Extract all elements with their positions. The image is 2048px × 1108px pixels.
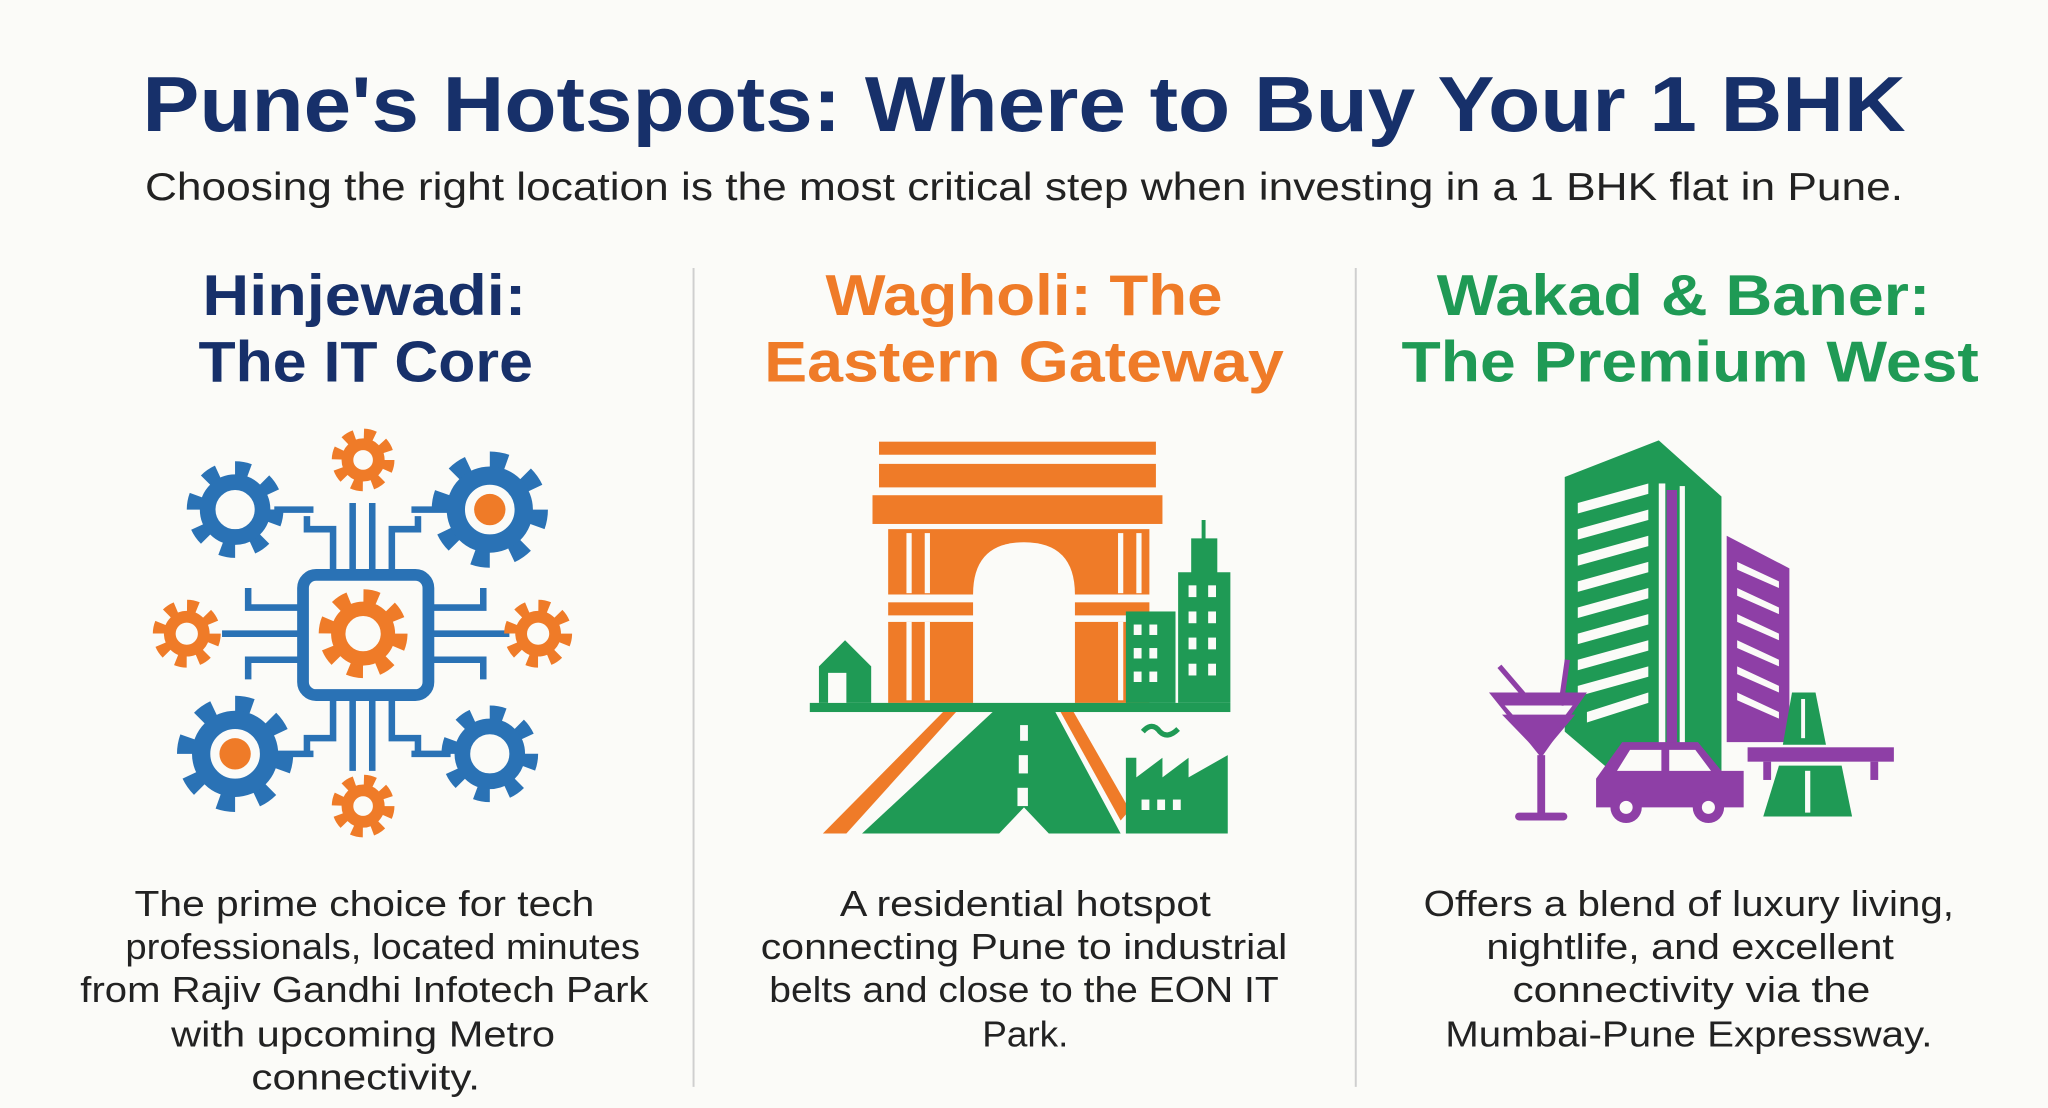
text: Wakad & Baner description: Offers a blend of luxury living, bbox=[1424, 883, 1954, 924]
text: Wakad & Baner description: connectivity via the bbox=[1512, 969, 1870, 1010]
heading: Hinjewadi bbox=[199, 264, 533, 395]
icon: gate, road and city bbox=[810, 442, 1230, 834]
text: Hinjewadi description: from Rajiv Gandhi Infotech Park bbox=[80, 969, 649, 1010]
heading: Wakad & Baner: Wakad & Baner: bbox=[1437, 264, 1930, 328]
text: Hinjewadi description: The prime choice for tech bbox=[135, 883, 594, 924]
text: Wakad & Baner description: Mumbai-Pune Expressway. bbox=[1445, 1013, 1932, 1054]
icon: premium buildings, car, cocktail, highway bbox=[1489, 440, 1894, 823]
subtitle: Choosing the right location is the most critical step when investing in a 1 BHK flat in Pune. bbox=[145, 166, 1903, 209]
heading: Wagholi: Eastern Gateway bbox=[764, 331, 1284, 395]
text: Hinjewadi description: connectivity. bbox=[251, 1057, 480, 1098]
text: Hinjewadi description bbox=[80, 883, 649, 1098]
text: Wagholi description bbox=[761, 883, 1287, 1054]
heading: Hinjewadi: Hinjewadi: bbox=[202, 264, 526, 328]
title: Pune's Hotspots: Where to Buy Your 1 BHK bbox=[142, 60, 1906, 148]
text: Wagholi description: A residential hotspot bbox=[840, 883, 1211, 924]
text: Wagholi description: belts and close to the EON IT bbox=[769, 969, 1279, 1010]
icon: IT gears and chip bbox=[159, 435, 566, 831]
heading: Wagholi: Wagholi: The bbox=[825, 264, 1223, 328]
text: Hinjewadi description: professionals, located minutes bbox=[125, 926, 640, 967]
text: Wakad & Baner description: nightlife, and excellent bbox=[1486, 926, 1894, 967]
text: Wagholi description: connecting Pune to industrial bbox=[761, 926, 1287, 967]
heading: Wakad & Baner bbox=[1401, 264, 1979, 395]
text: Hinjewadi description: with upcoming Metro bbox=[170, 1013, 555, 1054]
gears bbox=[159, 435, 566, 831]
heading: Wagholi bbox=[764, 264, 1284, 395]
text: Wakad & Baner description bbox=[1424, 883, 1954, 1054]
heading: Hinjewadi: The IT Core bbox=[199, 331, 533, 395]
text: Wagholi description: Park. bbox=[982, 1013, 1068, 1054]
heading: Wakad & Baner: The Premium West bbox=[1401, 331, 1979, 395]
